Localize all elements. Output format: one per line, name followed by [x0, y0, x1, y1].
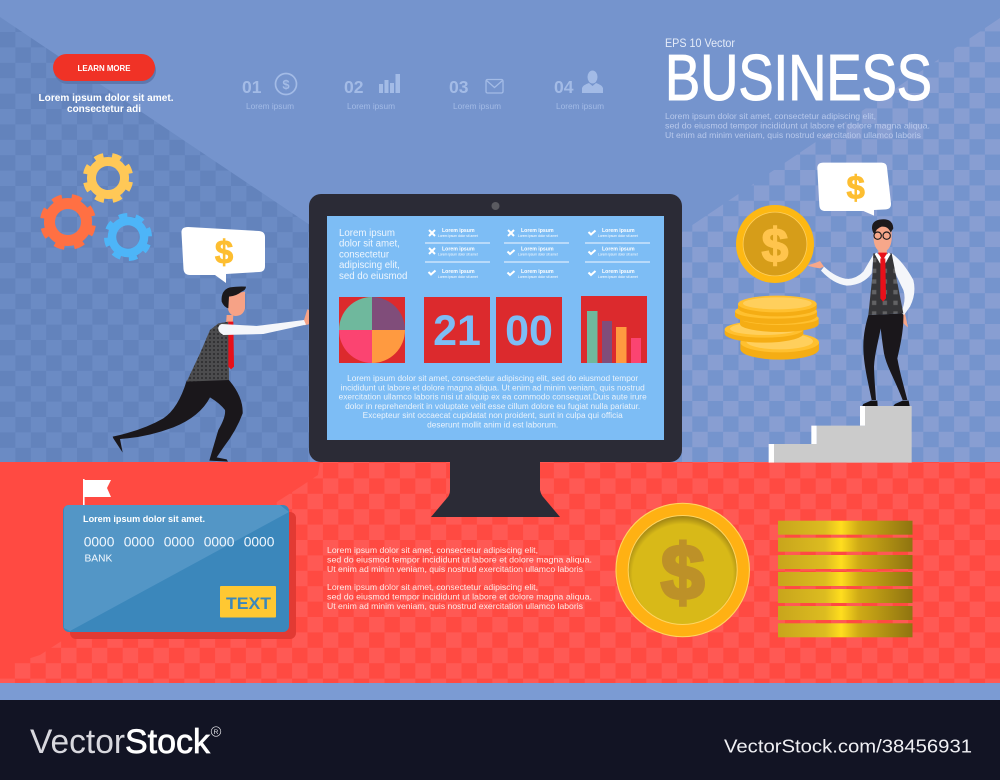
- screen checklist: Lorem ipsum dolor sit amet: [598, 234, 638, 238]
- screen checklist: Lorem ipsum: [521, 228, 554, 234]
- credit card: 0000: [164, 535, 195, 550]
- title block: EPS 10 Vector: [665, 38, 735, 50]
- clock tile: 21: [424, 297, 490, 363]
- step 01: Lorem ipsum: [246, 101, 294, 111]
- credit card: 0000: [84, 535, 115, 550]
- footer bar: Stock: [125, 723, 211, 761]
- screen paragraph: [339, 374, 647, 430]
- monitor frame: [309, 194, 682, 462]
- step 03: Lorem ipsum: [453, 101, 501, 111]
- footer bar: VectorStock.com/38456931: [724, 737, 972, 757]
- figure: man pushing monitor: [113, 286, 310, 462]
- screen paragraph: deserunt mollit anim id est laborum.: [427, 420, 558, 430]
- screen checklist: Lorem ipsum: [521, 246, 554, 252]
- screen checklist: Lorem ipsum: [521, 269, 554, 275]
- title block: [665, 38, 932, 140]
- dollar sign: right bubble: $: [847, 169, 865, 206]
- screen paragraph: Excepteur sint occaecat cupidatat non proident, sunt in culpa qui officia: [363, 411, 623, 420]
- text block on red: sed do eiusmod tempor incididunt ut labore et dolore magna aliqua.: [327, 554, 592, 564]
- footer bar: R: [214, 729, 219, 736]
- credit card: 0000: [124, 535, 155, 550]
- gold coin held up: [736, 205, 814, 283]
- step 04: Lorem ipsum: [556, 101, 604, 111]
- pie chart tile: [339, 297, 405, 363]
- clock tile: 21: 21: [433, 307, 481, 355]
- screen checklist: Lorem ipsum dolor sit amet: [598, 252, 638, 256]
- credit card: 0000: [244, 535, 275, 550]
- screen checklist: Lorem ipsum: [442, 269, 475, 275]
- text block on red: Ut enim ad minim veniam, quis nostrud exercitation ullamco laboris: [327, 564, 583, 574]
- screen heading text: Lorem ipsum: [339, 228, 395, 239]
- step 03: [449, 77, 503, 111]
- screen heading text: dolor sit amet,: [339, 239, 400, 250]
- step 04: 04: [554, 77, 574, 97]
- step 02: 02: [344, 77, 364, 97]
- screen heading text: [339, 228, 407, 282]
- screen checklist: Lorem ipsum: [602, 246, 635, 252]
- screen checklist: Lorem ipsum dolor sit amet: [438, 275, 478, 279]
- screen checklist: Lorem ipsum: [602, 269, 635, 275]
- stacked gold bars: [778, 521, 912, 637]
- screen paragraph: Lorem ipsum dolor sit amet, consectetur adipiscing elit, sed do eiusmod tempor: [347, 374, 639, 383]
- gold coin held up: $: [762, 220, 789, 273]
- screen paragraph: dolor in reprehenderit in voluptate velit esse cillum dolore eu fugiat nulla pariatur.: [345, 402, 640, 411]
- credit card: BANK: [84, 554, 112, 565]
- speech bubble: left: [181, 227, 265, 283]
- bar chart tile: [581, 296, 647, 363]
- screen paragraph: incididunt ut labore et dolore magna aliqua. Ut enim ad minim veniam, quis nostrud: [341, 383, 645, 392]
- screen checklist: Lorem ipsum dolor sit amet: [518, 234, 558, 238]
- button: learn more: LEARN MORE: [78, 63, 131, 73]
- text block on red: sed do eiusmod tempor incididunt ut labore et dolore magna aliqua.: [327, 592, 592, 602]
- credit card: Lorem ipsum dolor sit amet.: [83, 514, 205, 524]
- screen checklist: Lorem ipsum dolor sit amet: [438, 252, 478, 256]
- large gold coin: [615, 503, 750, 637]
- screen checklist: Lorem ipsum dolor sit amet: [438, 234, 478, 238]
- text block on red: Ut enim ad minim veniam, quis nostrud exercitation ullamco laboris: [327, 601, 583, 611]
- title block: Lorem ipsum dolor sit amet, consectetur adipiscing elit,: [665, 111, 876, 121]
- title block: Ut enim ad minim veniam, quis nostrud exercitation ullamco laboris: [665, 130, 921, 140]
- screen paragraph: exercitation ullamco laboris nisi ut aliquip ex ea commodo consequat.Duis aute irure: [339, 393, 647, 402]
- step 01: 01: [242, 77, 262, 97]
- step 03: 03: [449, 77, 469, 97]
- figure: man on stairs: [808, 219, 914, 406]
- monitor screen: [327, 216, 664, 440]
- large gold coin: $: [661, 528, 704, 616]
- step 02: [344, 74, 400, 111]
- credit card: 0000: [204, 535, 235, 550]
- button: learn more: [53, 54, 156, 84]
- screen heading text: consectetur: [339, 249, 390, 260]
- monitor: [309, 194, 682, 517]
- screen checklist: Lorem ipsum dolor sit amet: [598, 275, 638, 279]
- stairs: [769, 406, 912, 463]
- screen checklist: Lorem ipsum: [602, 228, 635, 234]
- footer bar: Vector: [30, 723, 125, 761]
- clock tile: 00: [496, 297, 562, 363]
- screen heading text: sed do eiusmod: [339, 271, 407, 282]
- step 02: Lorem ipsum: [347, 101, 395, 111]
- title block: sed do eiusmod tempor incididunt ut labore et dolore magna aliqua.: [665, 120, 930, 130]
- left intro text: consectetur adi: [67, 104, 141, 115]
- screen checklist: Lorem ipsum dolor sit amet: [518, 275, 558, 279]
- footer bar: [0, 700, 1000, 780]
- screen checklist: Lorem ipsum: [442, 246, 475, 252]
- coin stack: [725, 296, 819, 360]
- text block on red: Lorem ipsum dolor sit amet, consectetur adipiscing elit,: [327, 545, 538, 555]
- clock tile: 00: 00: [505, 307, 553, 355]
- left intro text: [38, 93, 174, 115]
- step 01: $: [282, 77, 290, 92]
- icon: flag: [83, 479, 111, 506]
- step 01: [242, 74, 296, 111]
- speech bubble: left: $: [215, 233, 233, 270]
- screen checklist: [425, 228, 650, 279]
- screen heading text: adipiscing elit,: [339, 260, 400, 271]
- title block: BUSINESS: [665, 41, 932, 114]
- text block on red: Lorem ipsum dolor sit amet, consectetur adipiscing elit,: [327, 582, 538, 592]
- speech bubble: right: [817, 163, 891, 216]
- monitor stand: [431, 460, 560, 517]
- text block on red: [327, 545, 592, 611]
- credit card: [63, 505, 296, 639]
- left intro text: Lorem ipsum dolor sit amet.: [38, 93, 174, 104]
- step 04: [554, 70, 604, 111]
- screen checklist: Lorem ipsum dolor sit amet: [518, 252, 558, 256]
- credit card: TEXT: [226, 595, 271, 613]
- screen checklist: Lorem ipsum: [442, 228, 475, 234]
- icon: gears: [40, 152, 156, 265]
